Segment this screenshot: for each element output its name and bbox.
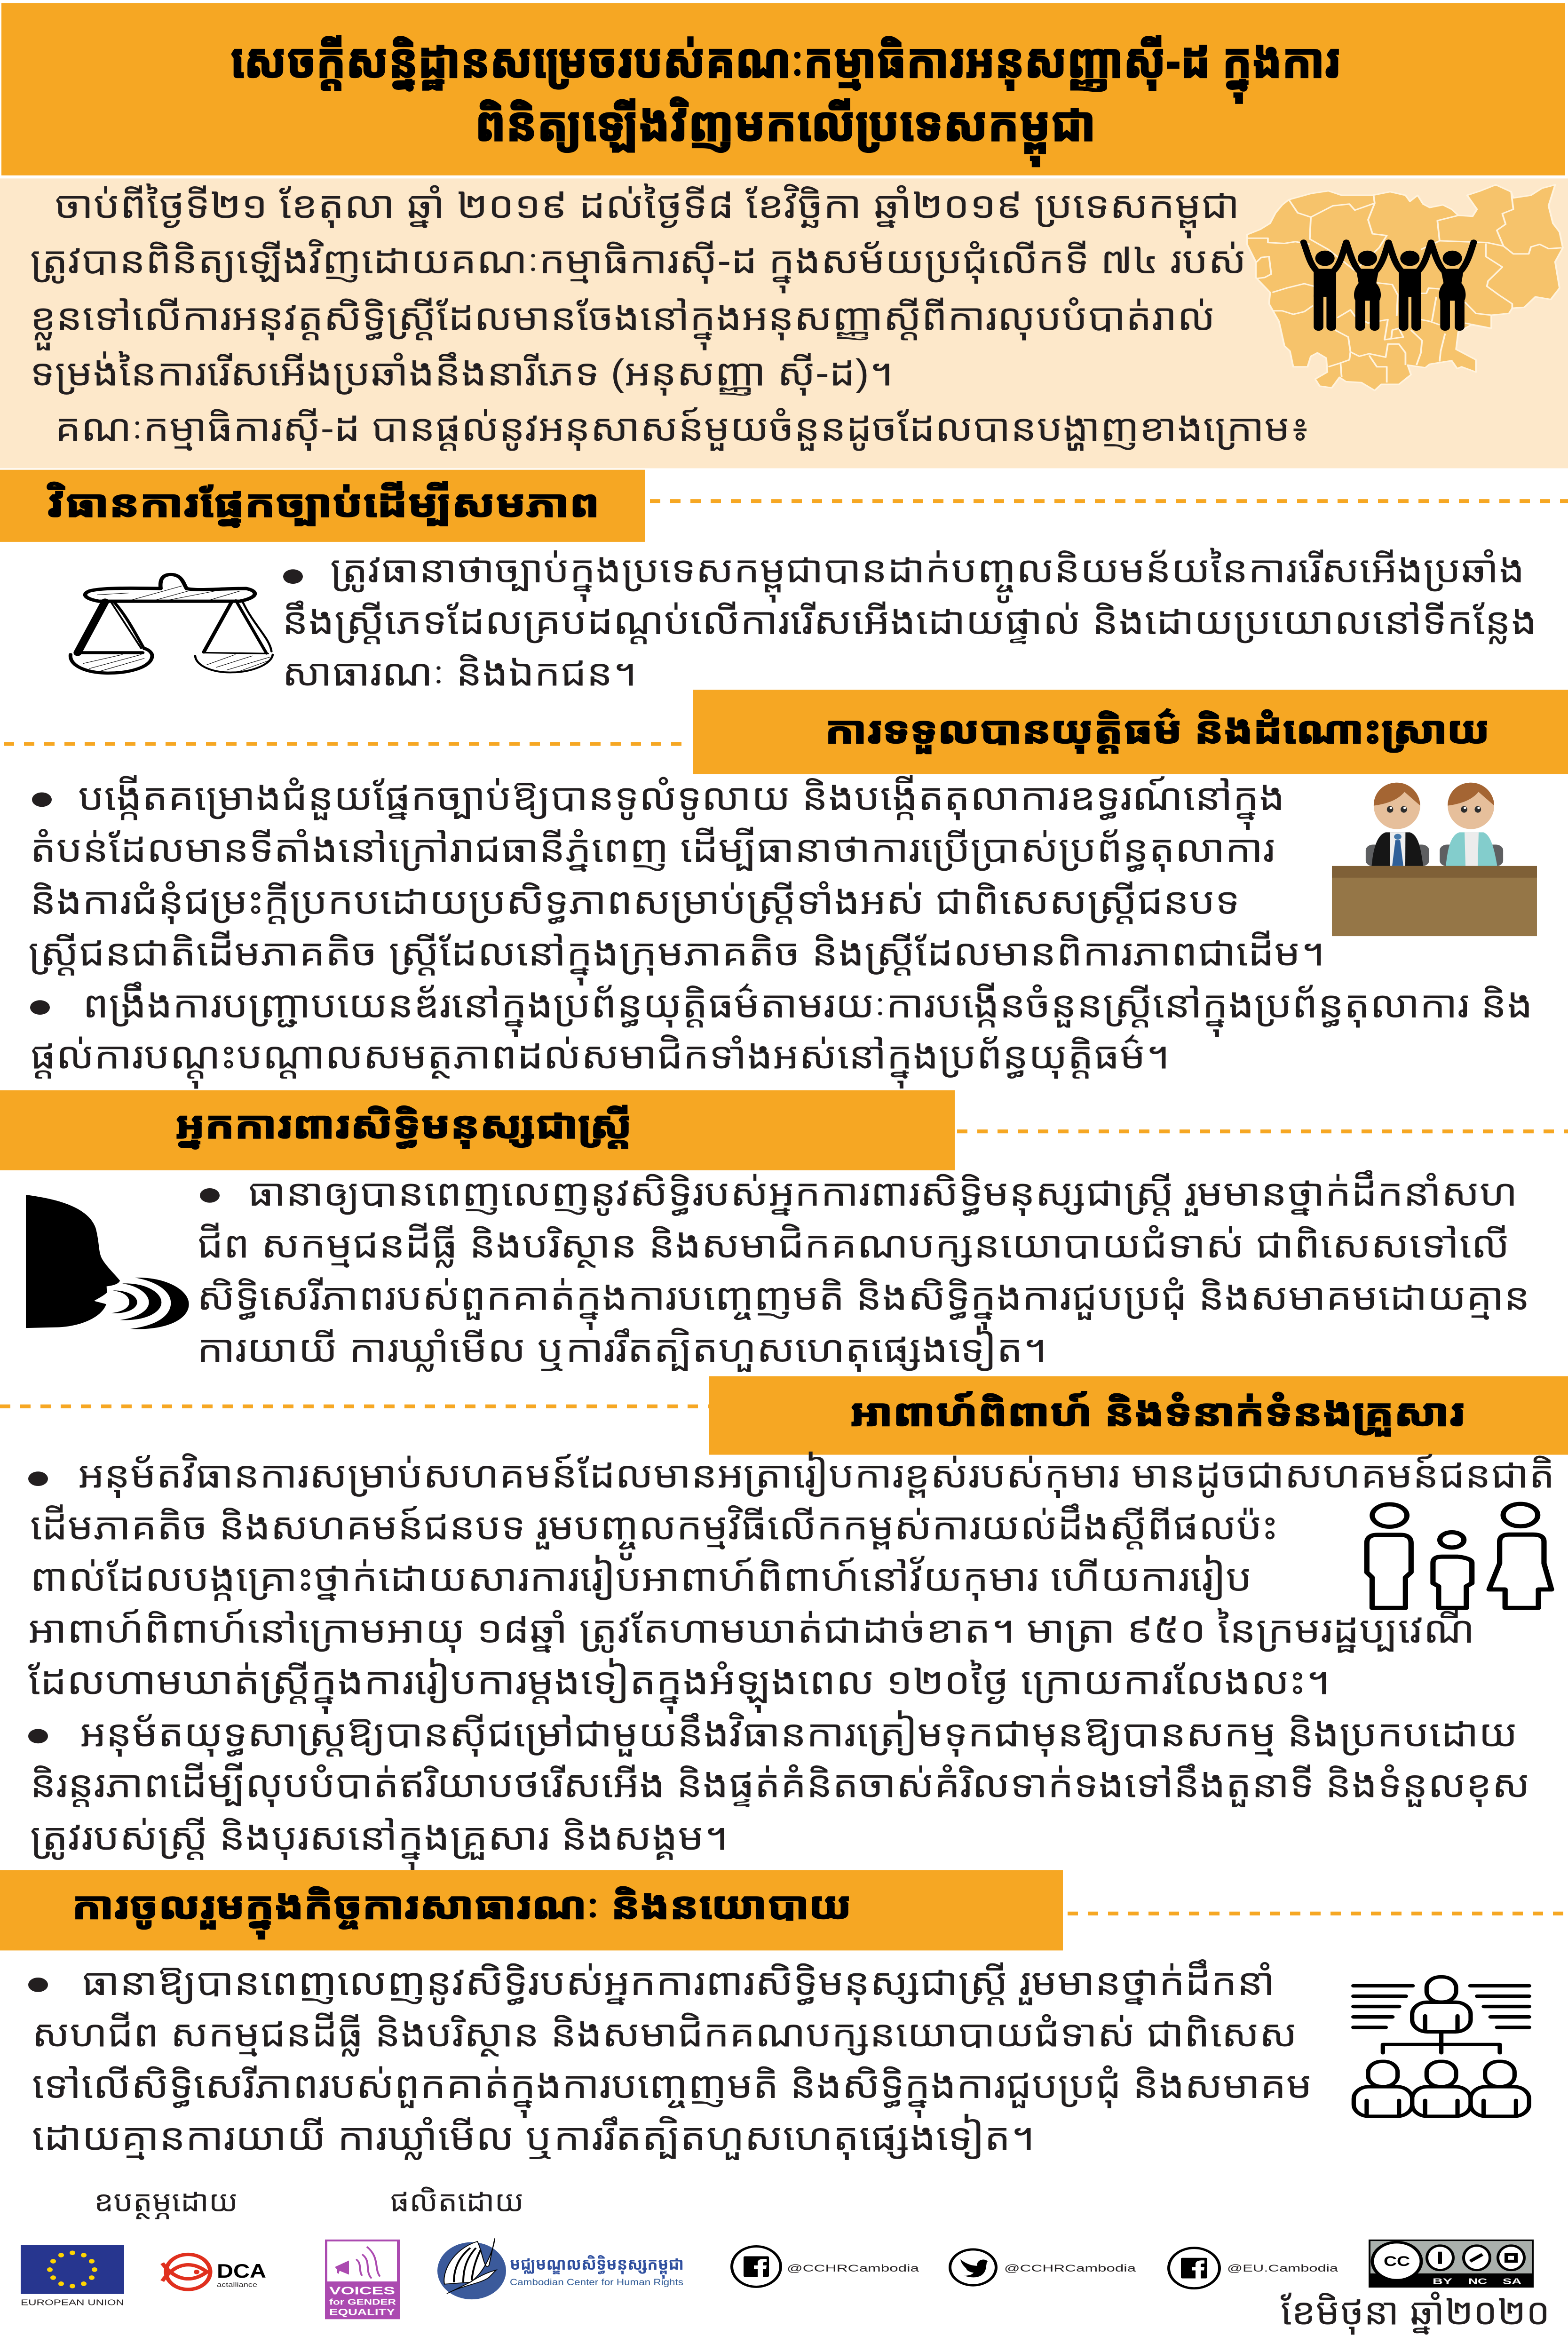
text block: access to justice: និងការជំនុំជម្រះក្តីប្រកបដោយប្រសិទ្ធភាពសម្រាប់ស្ត្រីទាំងអស់ ជាពិសេសស្ត្រីជនបទ — [30, 880, 1240, 924]
logo: DCA actalliance — [162, 2254, 266, 2289]
social: CCHR Twitter — [950, 2249, 1136, 2285]
logo: Voices for Gender Equality: VOICES — [329, 2285, 395, 2297]
section heading: legal measures: វិធានការផ្នែកច្បាប់ដើម្បីសមភាព — [47, 482, 600, 528]
intro text: ចាប់ពីថ្ងៃទី២១ ខែតុលា ឆ្នាំ ២០១៩ ដល់ថ្ងៃទី៨ ខែវិច្ឆិកា ឆ្នាំ២០១៩ ប្រទេសកម្ពុជា — [55, 183, 1240, 238]
logo: DCA actalliance: actalliance — [217, 2281, 257, 2288]
icon: family — [1367, 1504, 1552, 1608]
text block: marriage and family relations — [28, 1451, 1555, 1870]
logo: Voices for Gender Equality — [325, 2240, 400, 2319]
logo: Cambodian Center for Human Rights: មជ្ឈមណ្ឌលសិទ្ធិមនុស្សកម្ពុជា — [510, 2255, 684, 2279]
section heading: marriage and family relations — [0, 1376, 1568, 1455]
text block: women human rights defenders — [197, 1170, 1530, 1372]
text block: access to justice: ស្ត្រីជនជាតិដើមភាគតិច ស្ត្រីដែលនៅក្នុងក្រុមភាគតិច និងស្ត្រីដែលមានពិការភាពជាដើម។ — [28, 930, 1325, 985]
social: CCHR Twitter: @CCHRCambodia — [1004, 2263, 1136, 2274]
logo: Voices for Gender Equality: for GENDER — [329, 2297, 396, 2307]
text block: marriage and family relations: ពាល់ដែលបង្កគ្រោះថ្នាក់ដោយសារការរៀបអាពាហ៍ពិពាហ៍នៅវ័យកុមារ ហើយការរៀប — [30, 1554, 1252, 1601]
label: produced by: ផលិតដោយ — [390, 2185, 524, 2217]
text block: marriage and family relations: ត្រូវរបស់ស្ត្រី និងបុរសនៅក្នុងគ្រួសារ និងសង្គម។ — [30, 1816, 728, 1870]
intro text — [30, 183, 1310, 451]
social: CCHR Facebook — [732, 2246, 919, 2287]
label: supported by: ឧបត្ថម្ភដោយ — [94, 2185, 238, 2219]
text block: public and political participation: ទៅលើសិទ្ធិសេរីភាពរបស់ពួកគាត់ក្នុងការបញ្ចេញមតិ និងសិទ្ធិក្នុងការជួបប្រជុំ និងសមាគម — [32, 2064, 1312, 2118]
title text: ពិនិត្យឡើងវិញមកលើប្រទេសកម្ពុជា — [475, 97, 1096, 167]
text block: legal measures: សាធារណៈ និងឯកជន។ — [282, 652, 637, 693]
icon: two judges at bench — [1332, 783, 1537, 936]
section heading: women human rights defenders: អ្នកការពារសិទ្ធិមនុស្សជាស្ត្រី — [175, 1104, 632, 1149]
logo: Voices for Gender Equality: EQUALITY — [329, 2307, 396, 2317]
logo: DCA actalliance: DCA — [217, 2260, 266, 2282]
text block: public and political participation: សហជីព សកម្មជនដីធ្លី និងបរិស្ថាន និងសមាជិកគណបក្សនយោបាយជំទាស់ ជាពិសេស — [32, 2011, 1297, 2057]
badge: Creative Commons BY NC SA: SA — [1503, 2277, 1521, 2286]
section heading: marriage and family relations: អាពាហ៍ពិពាហ៍ និងទំនាក់ទំនងគ្រួសារ — [850, 1392, 1465, 1437]
text block: access to justice: តំបន់ដែលមានទីតាំងនៅក្រៅរាជធានីភ្នំពេញ ដើម្បីធានាថាការប្រើប្រាស់ប្រព័ន្ធតុលាការ — [30, 827, 1275, 872]
badge: Creative Commons BY NC SA — [1369, 2240, 1534, 2288]
intro text: ត្រូវបានពិនិត្យឡើងវិញដោយគណៈកម្មាធិការស៊ី-ដ ក្នុងសម័យប្រជុំលើកទី ៧៤ របស់ — [30, 239, 1246, 294]
logo: Cambodian Center for Human Rights — [437, 2238, 684, 2299]
section heading: women human rights defenders — [0, 1090, 1568, 1170]
title text — [230, 35, 1340, 167]
intro text: គណៈកម្មាធិការស៊ី-ដ បានផ្តល់នូវអនុសាសន៍មួយចំនួនដូចដែលបានបង្ហាញខាងក្រោម៖ — [55, 407, 1310, 451]
logo: Cambodian Center for Human Rights: Cambodian Center for Human Rights — [510, 2277, 683, 2288]
social: CCHR Facebook: @CCHRCambodia — [787, 2263, 919, 2274]
text block: access to justice: ផ្តល់ការបណ្តុះបណ្តាលសមត្ថភាពដល់សមាជិកទាំងអស់នៅក្នុងប្រព័ន្ធយុត្តិធម៌។ — [30, 1034, 1170, 1089]
panel: introduction — [0, 178, 1568, 468]
badge: Creative Commons BY NC SA: CC — [1384, 2253, 1410, 2269]
icon: scales — [71, 574, 273, 673]
text block: marriage and family relations: ដើមភាគតិច និងសហគមន៍ជនបទ រួមបញ្ចូលកម្មវិធីលើកកម្ពស់ការយល់ដឹងស្តីពីផលប៉ះ — [30, 1503, 1278, 1560]
text block: public and political participation — [28, 1959, 1312, 2160]
section heading: access to justice — [4, 690, 1568, 774]
badge: Creative Commons BY NC SA: BY — [1433, 2277, 1453, 2286]
intro text: ខ្លួនទៅលើការអនុវត្តសិទ្ធិស្ត្រីដែលមានចែងនៅក្នុងអនុសញ្ញាស្តីពីការលុបបំបាត់រាល់ — [30, 296, 1215, 350]
social: EU Facebook: @EU.Cambodia — [1227, 2263, 1338, 2274]
badge: Creative Commons BY NC SA: NC — [1468, 2277, 1487, 2286]
map of Cambodia with people — [1247, 185, 1563, 390]
text block: access to justice — [28, 775, 1533, 1089]
text block: public and political participation: ធានាឱ្យបានពេញលេញនូវសិទ្ធិរបស់អ្នកការពារសិទ្ធិមនុស្សជាស្ត្រី រួមមានថ្នាក់ដឹកនាំ — [82, 1959, 1275, 2005]
section heading: public and political participation — [0, 1870, 1568, 1950]
logo: European Union: EUROPEAN UNION — [21, 2298, 124, 2307]
title banner — [1, 3, 1565, 175]
logo: European Union — [21, 2245, 124, 2307]
text block: marriage and family relations: ដែលហាមឃាត់ស្ត្រីក្នុងការរៀបការម្តងទៀតក្នុងអំឡុងពេល ១២០ថ្ងៃ ក្រោយការលែងលះ។ — [28, 1658, 1330, 1714]
text block: public and political participation: ដោយគ្មានការយាយី ការឃ្លាំមើល ឬការរឹតត្បិតហួសហេតុផ្សេងទៀត។ — [32, 2114, 1035, 2160]
section heading: public and political participation: ការចូលរួមក្នុងកិច្ចការសាធារណៈ និងនយោបាយ — [72, 1885, 852, 1939]
icon: speaking head — [26, 1195, 189, 1329]
intro text: ទម្រង់នៃការរើសអើងប្រឆាំងនឹងនារីភេទ (អនុសញ្ញា ស៊ី-ដ)។ — [30, 351, 893, 396]
section heading: access to justice: ការទទួលបានយុត្តិធម៌ និងដំណោះស្រាយ — [825, 709, 1490, 754]
social: EU Facebook — [1169, 2248, 1338, 2288]
section heading: legal measures — [0, 470, 1568, 542]
text block: women human rights defenders: ការយាយី ការឃ្លាំមើល ឬការរឹតត្បិតហួសហេតុផ្សេងទៀត។ — [197, 1325, 1047, 1372]
text block: legal measures — [282, 548, 1537, 693]
icon: leader and group — [1354, 1977, 1529, 2116]
text block: access to justice: បង្កើតគម្រោងជំនួយផ្នែកច្បាប់ឱ្យបានទូលំទូលាយ និងបង្កើតតុលាការឧទ្ធរណ៍នៅក្នុង — [78, 775, 1285, 830]
